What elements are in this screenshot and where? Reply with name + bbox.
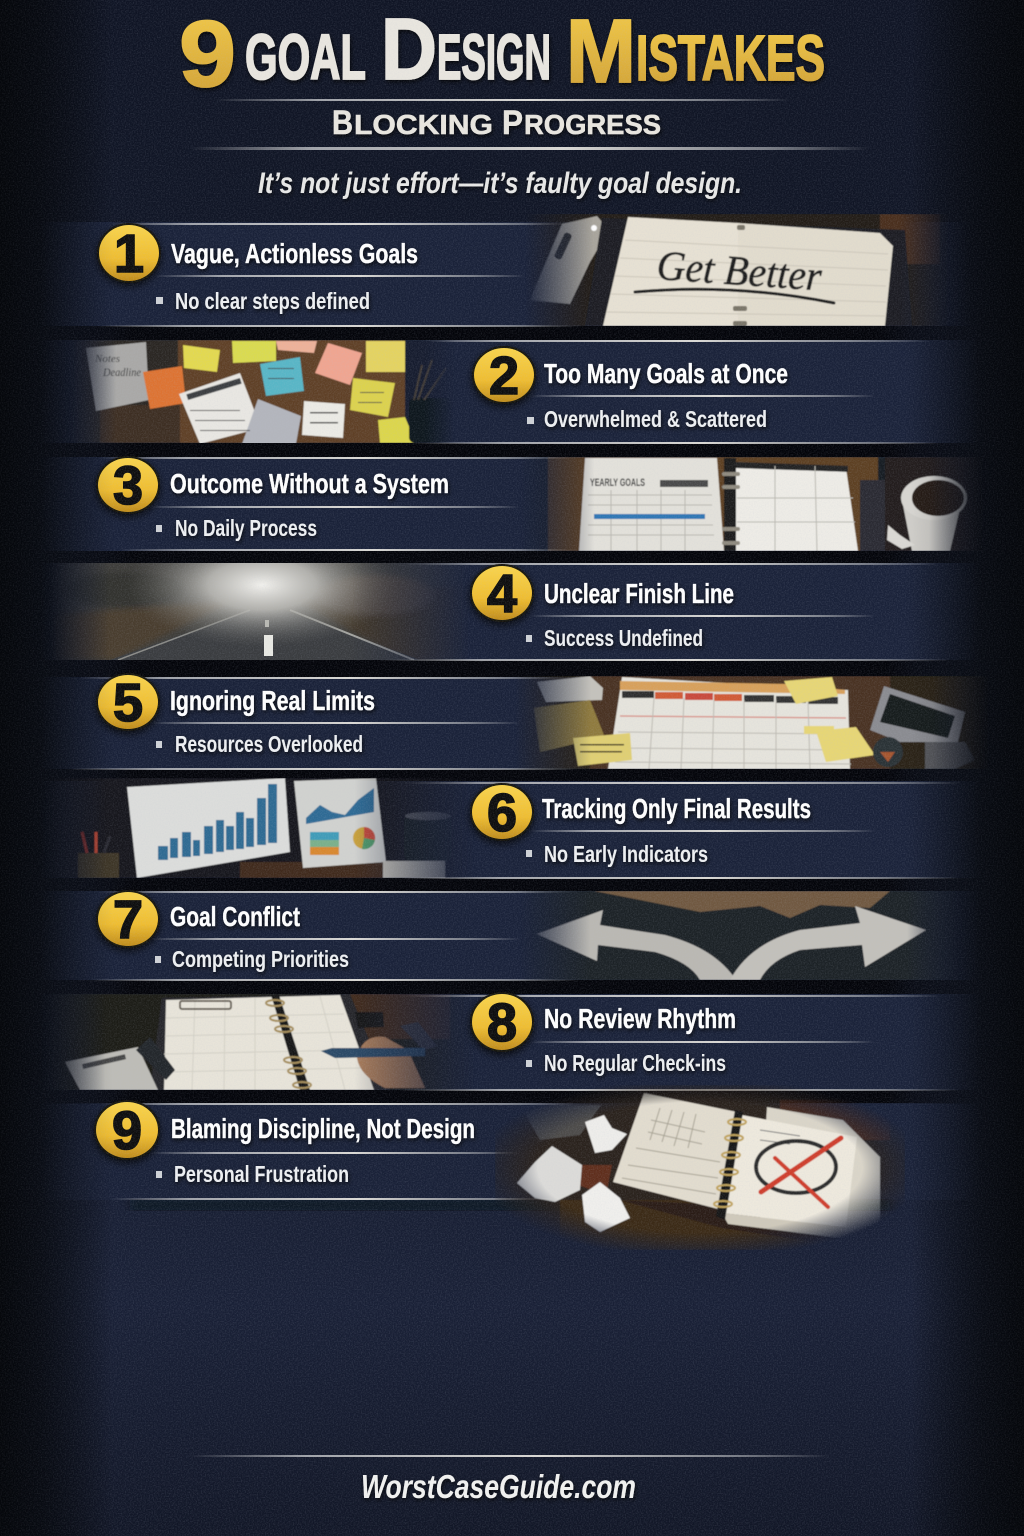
heading 3: Outcome Without a System <box>170 468 449 499</box>
subtitle <box>332 104 661 142</box>
title <box>179 1 825 106</box>
photo: notebook Get Better: Get Better <box>655 243 824 301</box>
heading 2: Too Many Goals at Once <box>544 358 788 389</box>
row 9: blaming discipline <box>40 1085 980 1250</box>
heading 9: Blaming Discipline, Not Design <box>171 1113 475 1144</box>
heading 4: Unclear Finish Line <box>544 578 734 609</box>
photo: sticky notes: Deadline <box>102 365 142 379</box>
photo: notebook with crossed circle <box>495 1085 905 1250</box>
bullet 7 <box>155 956 161 963</box>
text 8: No Regular Check-ins <box>544 1050 726 1076</box>
row 6: tracking final results <box>40 778 980 891</box>
badge 9: 9 <box>112 1101 142 1161</box>
badge 5 <box>96 673 160 733</box>
row 1: vague goals <box>40 214 970 340</box>
photo: sticky notes: Notes <box>94 353 120 365</box>
photo: diverging arrows <box>520 891 960 980</box>
photo: sticky notes <box>70 340 455 444</box>
heading 5: Ignoring Real Limits <box>170 685 375 716</box>
photo: calendar and notes <box>515 676 990 769</box>
footer: website: WorstCaseGuide.com <box>361 1468 636 1505</box>
title: ESIGN <box>437 21 551 93</box>
badge 3: 3 <box>113 456 143 516</box>
bullet 2 <box>527 417 534 424</box>
title rule <box>215 99 790 101</box>
heading 1: Vague, Actionless Goals <box>171 238 418 269</box>
badge 2: 2 <box>489 346 519 406</box>
photo: planner and hand <box>45 994 475 1090</box>
text 5: Resources Overlooked <box>175 731 363 757</box>
title: ISTAKES <box>636 22 825 94</box>
heading 6: Tracking Only Final Results <box>542 793 811 824</box>
photo: yearly goals binder: YEARLY GOALS <box>590 477 645 489</box>
bullet 4 <box>526 635 532 642</box>
photo: yearly goals binder <box>520 457 985 551</box>
photo: foggy road <box>60 563 460 660</box>
badge 6: 6 <box>487 783 517 843</box>
subtitle: B <box>332 104 353 142</box>
row 5: ignoring limits <box>40 673 990 781</box>
subtitle: P <box>502 104 523 142</box>
badge 7: 7 <box>113 890 143 950</box>
text 6: No Early Indicators <box>544 841 708 867</box>
text 7: Competing Priorities <box>172 946 349 972</box>
title: D <box>381 1 437 98</box>
badge 3 <box>96 456 160 516</box>
text 4: Success Undefined <box>544 625 703 651</box>
text 3: No Daily Process <box>175 515 317 541</box>
subtitle rule <box>190 147 870 150</box>
bullet 1 <box>156 297 163 304</box>
heading 7: Goal Conflict <box>170 901 300 932</box>
badge 2 <box>472 346 536 406</box>
bullet 9 <box>156 1171 162 1178</box>
photo: chart monitors <box>45 778 475 878</box>
tagline: It’s not just effort—it’s faulty goal design. <box>258 167 742 200</box>
footer rule <box>190 1455 830 1457</box>
text 9: Personal Frustration <box>174 1161 349 1187</box>
row 7: goal conflict <box>40 890 980 994</box>
text 1: No clear steps defined <box>175 288 370 314</box>
row 4: unclear finish line <box>56 563 958 677</box>
badge 8: 8 <box>487 993 517 1053</box>
badge 6 <box>470 783 534 843</box>
subtitle: ROGRESS <box>524 109 661 140</box>
text 2: Overwhelmed & Scattered <box>544 406 767 432</box>
bullet 8 <box>526 1060 532 1067</box>
badge 4 <box>470 564 534 624</box>
row 8: no review rhythm <box>40 992 980 1103</box>
bullet 3 <box>156 525 162 532</box>
badge 8 <box>470 992 534 1053</box>
bullet 6 <box>526 850 532 857</box>
badge 9 <box>94 1100 160 1161</box>
title: M <box>566 2 636 102</box>
bullet 5 <box>156 741 162 748</box>
badge 7 <box>96 890 160 950</box>
badge 1 <box>97 223 161 284</box>
row 3: outcome without system <box>40 456 985 563</box>
heading 8: No Review Rhythm <box>544 1003 736 1034</box>
title: 9 <box>179 1 236 106</box>
title: GOAL <box>245 21 366 93</box>
badge 1: 1 <box>114 224 144 284</box>
badge 4: 4 <box>487 564 517 624</box>
row 2: too many goals <box>40 340 980 457</box>
photo: notebook Get Better <box>525 214 950 326</box>
subtitle: LOCKING <box>354 109 493 140</box>
badge 5: 5 <box>113 673 143 733</box>
